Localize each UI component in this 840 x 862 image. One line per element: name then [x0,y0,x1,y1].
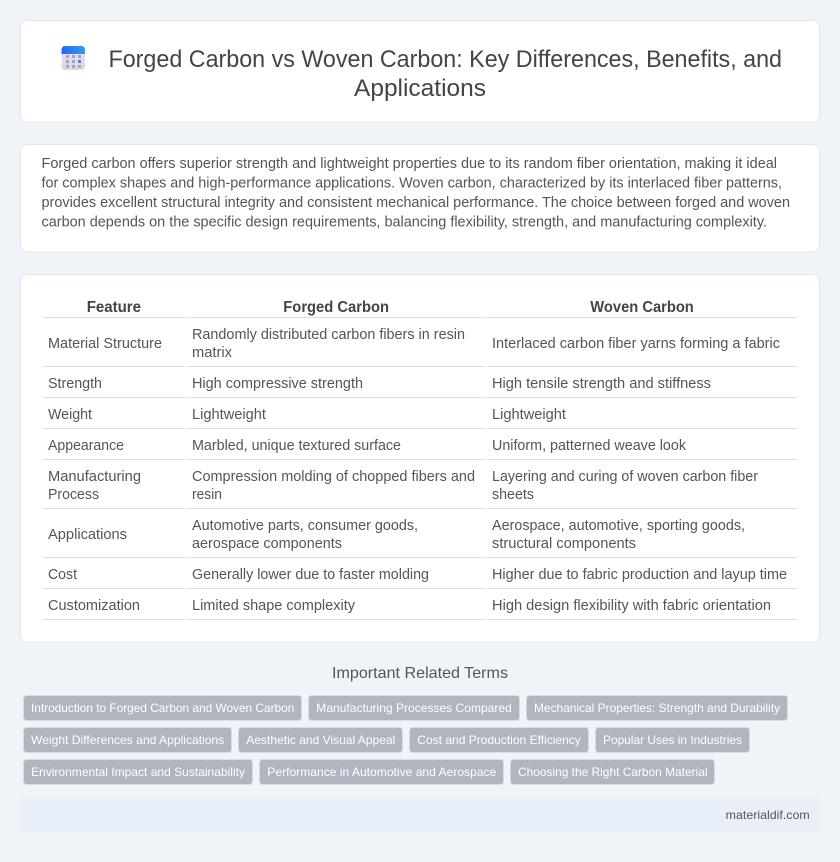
row: applications [43,518,797,558]
tag: weight differences [24,728,232,752]
row: manufacturing process: Layering and curing of woven carbon fiber [492,469,758,485]
row: material structure [43,327,797,367]
table header row: Woven Carbon [590,299,694,316]
heading: important related terms: Important Related Terms [332,665,508,682]
tag: cost efficiency [410,728,588,752]
panel: header [20,20,820,122]
tag: manufacturing processes [308,696,520,720]
row: manufacturing process: Compression molding of chopped fibers and [192,469,475,485]
row: weight: Weight [48,407,92,423]
intro paragraph: Forged carbon offers superior strength and lightweight properties due to its random fiber orientation, making it ideal [42,156,777,172]
row: applications: Aerospace, automotive, sporting goods, [492,518,745,534]
intro paragraph: carbon depends on the specific design requirements, balancing flexibility, strength, and manufacturing complexity. [42,214,767,230]
row: customization: High design flexibility with fabric orientation [492,598,771,614]
row: material structure: matrix [192,345,233,361]
row: manufacturing process: resin [192,487,222,503]
tag: popular uses [596,728,750,752]
title: Applications [354,75,486,102]
row: manufacturing process: sheets [492,487,534,503]
row: manufacturing process: Process [48,487,99,503]
row: applications: Automotive parts, consumer goods, [192,518,418,534]
tag: performance [260,760,504,784]
row: weight [43,407,797,429]
row: cost: Higher due to fabric production and layup time [492,567,787,583]
tag: choosing material: Choosing the Right Carbon Material [518,765,708,779]
tag list: related terms [24,696,788,784]
row: material structure: Interlaced carbon fiber yarns forming a fabric [492,336,780,352]
title [108,46,782,102]
row: strength [43,376,797,398]
icon: calendar [62,46,85,70]
tag: environmental impact: Environmental Impact and Sustainability [31,765,245,779]
tag: introduction: Introduction to Forged Carbon and Woven Carbon [31,701,294,715]
tag: aesthetic appeal [238,728,402,752]
panel: introduction [20,144,820,252]
row: applications: structural components [492,536,636,552]
row: strength: Strength [48,376,102,392]
tag: manufacturing processes: Manufacturing Processes Compared [316,701,512,715]
tag: introduction [24,696,302,720]
tag: environmental impact [24,760,252,784]
tag: popular uses: Popular Uses in Industries [603,733,742,747]
intro paragraph [42,156,790,230]
row: appearance [43,438,797,460]
tag: mechanical properties: Mechanical Properties: Strength and Durability [534,701,780,715]
tag: performance: Performance in Automotive and Aerospace [267,765,497,779]
row: appearance: Marbled, unique textured surface [192,438,401,454]
row: cost: Cost [48,567,77,583]
row: applications: Applications [48,527,127,543]
intro paragraph: provides excellent structural integrity and consistent mechanical performance. The choice between forged and woven [42,195,790,211]
footer bar [20,798,820,832]
row: applications: aerospace components [192,536,342,552]
panel: comparison table [20,274,820,642]
row: weight: Lightweight [192,407,266,423]
row: weight: Lightweight [492,407,566,423]
row: cost [43,567,797,589]
row: customization: Customization [48,598,140,614]
row: strength: High tensile strength and stiffness [492,376,711,392]
row: manufacturing process: Manufacturing [48,469,141,485]
row: cost: Generally lower due to faster molding [192,567,429,583]
row: customization: Limited shape complexity [192,598,356,614]
row: strength: High compressive strength [192,376,363,392]
footer bar: materialdif.com [726,808,810,822]
row: appearance: Uniform, patterned weave look [492,438,687,454]
table header row: Feature [87,299,141,316]
title: Forged Carbon vs Woven Carbon: Key Differences, Benefits, and [108,46,782,73]
row: customization [43,598,797,620]
tag: choosing material [510,760,714,784]
tag: aesthetic appeal: Aesthetic and Visual Appeal [246,733,395,747]
tag: mechanical properties [526,696,788,720]
table header row [43,299,797,318]
intro paragraph: for complex shapes and high-performance applications. Woven carbon, characterized by its interlaced fiber patterns, [42,176,782,192]
table header row: Forged Carbon [283,299,389,316]
row: appearance: Appearance [48,438,124,454]
row: material structure: Randomly distributed carbon fibers in resin [192,327,465,343]
tag: cost efficiency: Cost and Production Efficiency [417,733,581,747]
tag: weight differences: Weight Differences and Applications [31,733,224,747]
row: material structure: Material Structure [48,336,162,352]
row: manufacturing process [43,469,797,509]
